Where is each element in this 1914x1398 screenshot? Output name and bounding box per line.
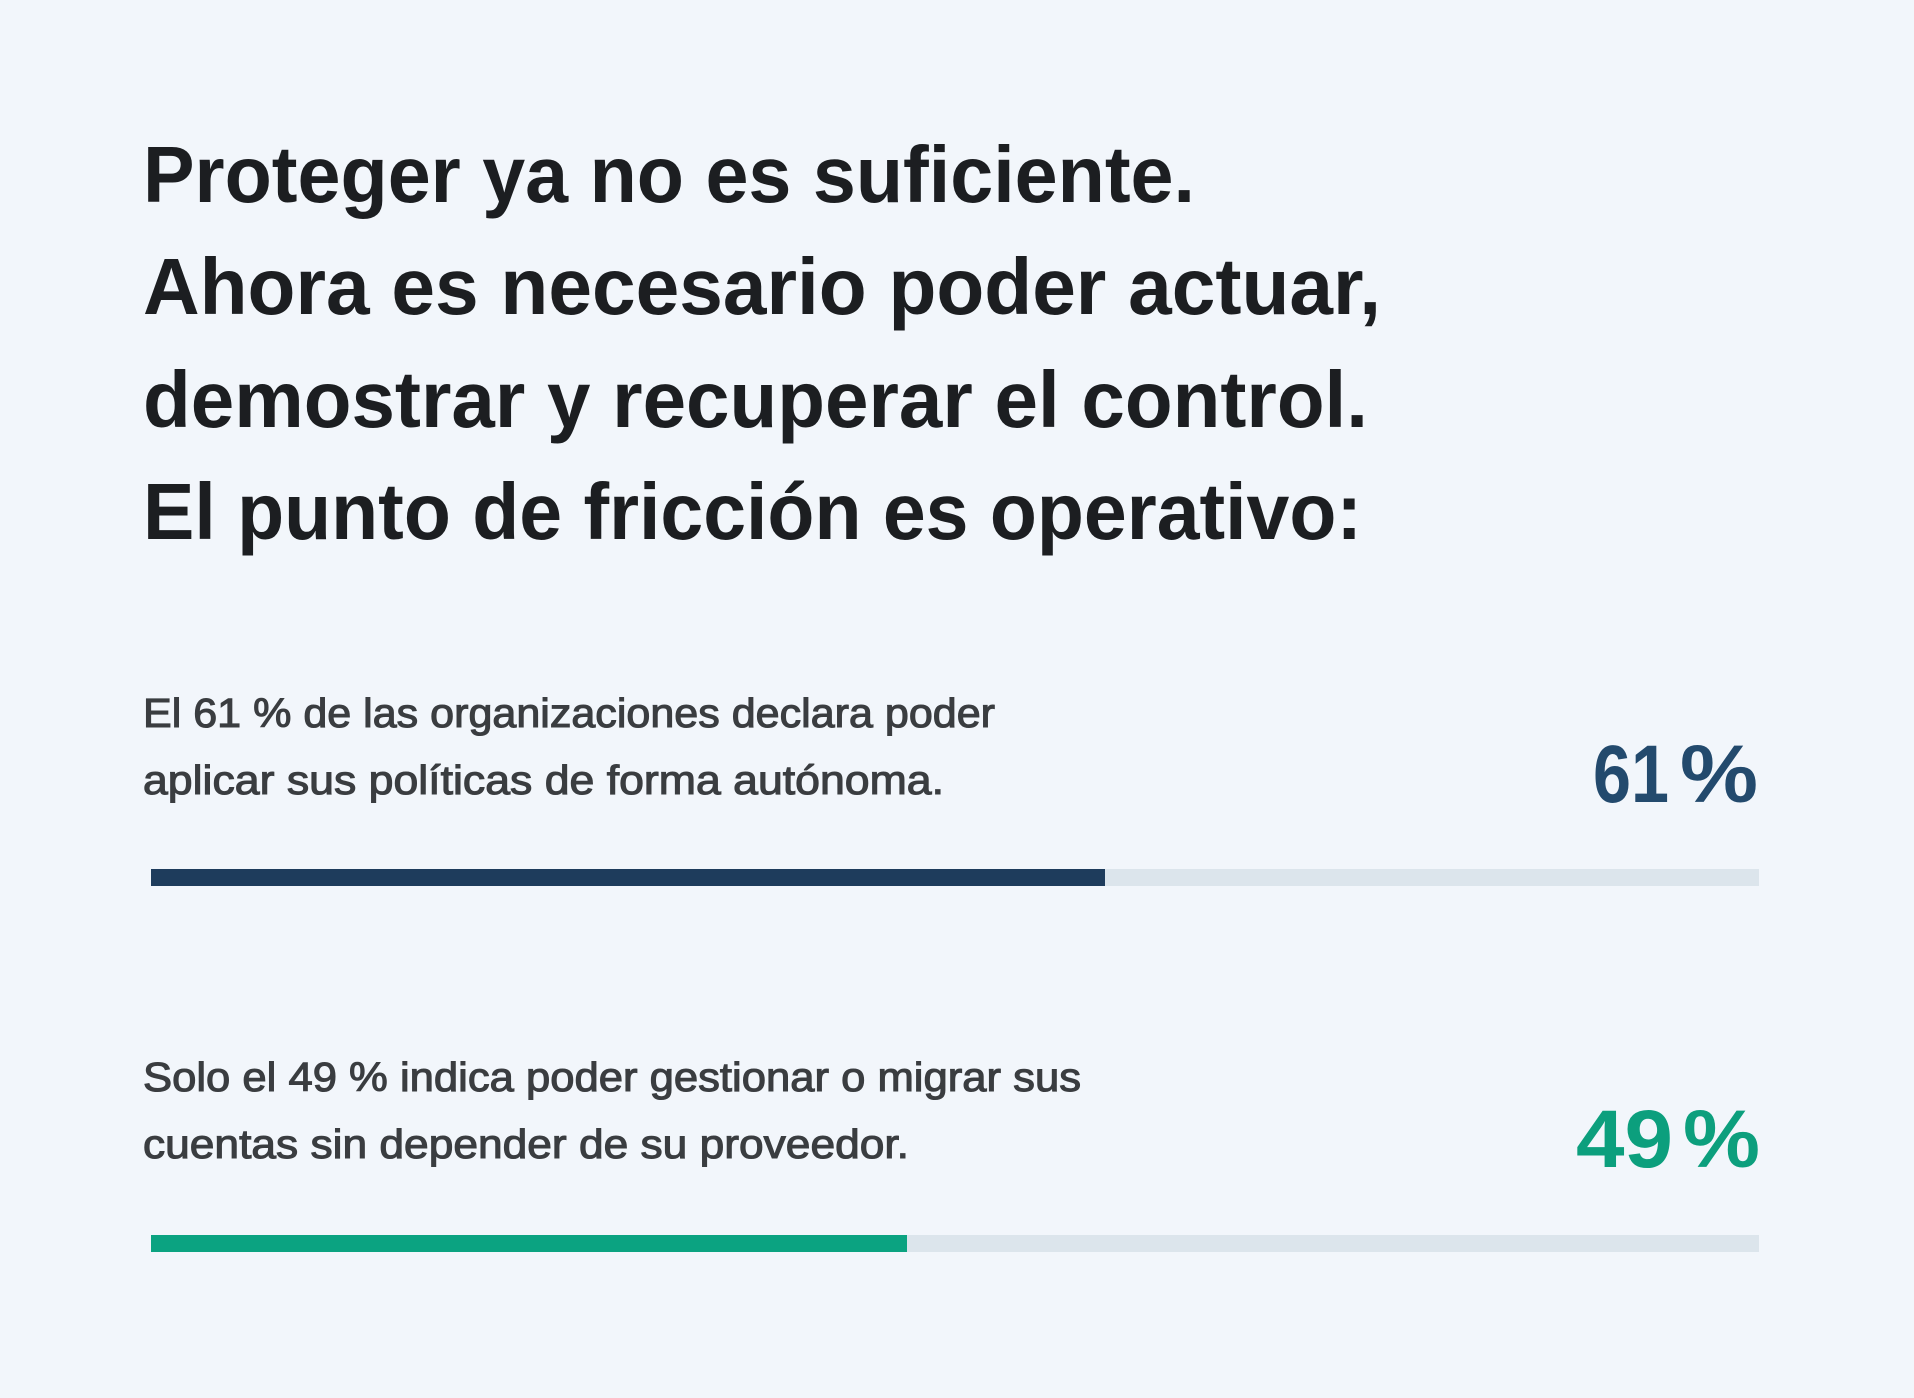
title: Proteger ya no es suficiente.: [143, 130, 1195, 219]
big number: 49 %: %: [1683, 1094, 1760, 1185]
big number: 49 %: 49: [1576, 1094, 1673, 1185]
title: [143, 130, 1381, 556]
stat text: 49 %: cuentas sin depender de su proveedor.: [143, 1121, 909, 1167]
title: Ahora es necesario poder actuar,: [143, 242, 1381, 331]
title: demostrar y recuperar el control.: [143, 355, 1368, 444]
panel: stat 49 %: [143, 1054, 1760, 1252]
stat text: 61 %: [143, 690, 995, 803]
progress bar: 49 %: [151, 1235, 1759, 1252]
stat text: 49 %: [143, 1054, 1081, 1167]
stat text: 49 %: Solo el 49 % indica poder gestionar o migrar sus: [143, 1054, 1081, 1100]
stat text: 61 %: aplicar sus políticas de forma autónoma.: [143, 757, 944, 803]
progress bar: 61 %: [151, 869, 1759, 886]
big number: 49 %: [1576, 1094, 1760, 1185]
big number: 61 %: [1593, 729, 1758, 820]
panel: stat 61 %: [143, 690, 1759, 886]
big number: 61 %: 61: [1593, 729, 1669, 820]
title: El punto de fricción es operativo:: [143, 467, 1362, 556]
stat text: 61 %: El 61 % de las organizaciones declara poder: [143, 690, 995, 736]
big number: 61 %: %: [1680, 729, 1758, 820]
